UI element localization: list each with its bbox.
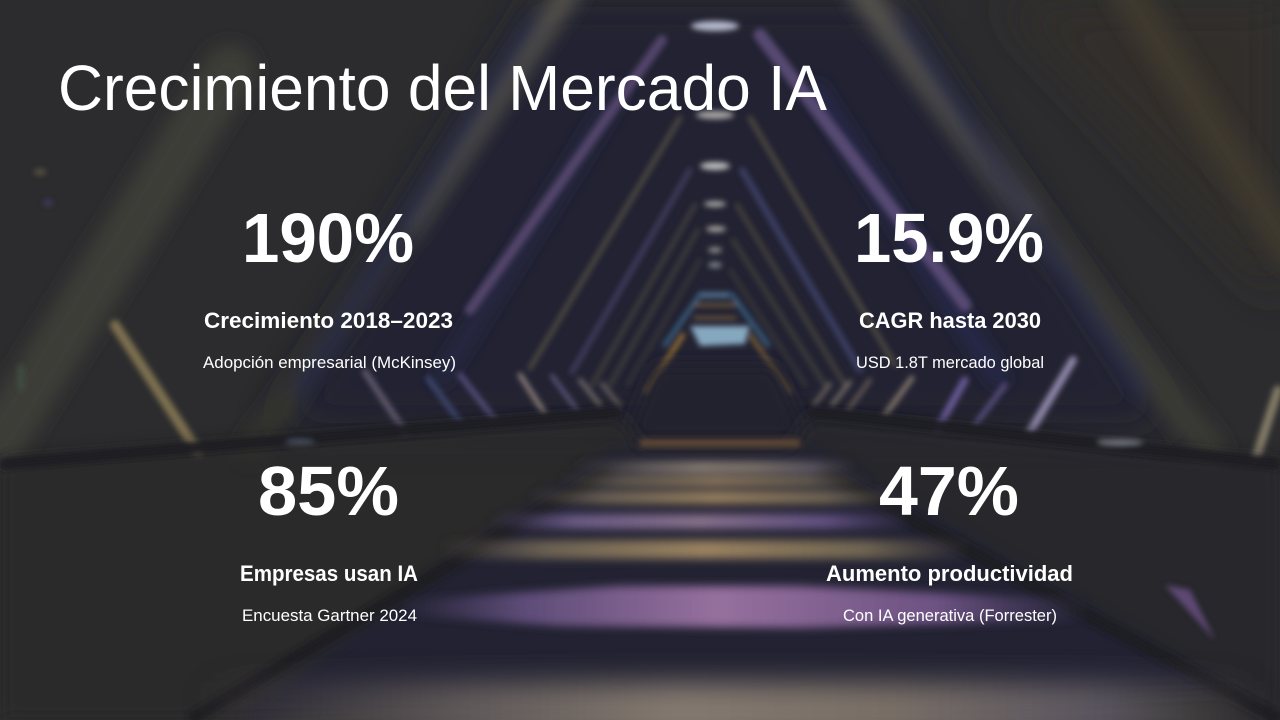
panel: 15.9% CAGR stat	[854, 199, 1044, 372]
panel: 47% productivity stat	[826, 452, 1073, 625]
value: 190%	[242, 199, 414, 277]
panel: 190% growth stat	[203, 199, 456, 372]
description: Adopción empresarial (McKinsey)	[203, 354, 456, 372]
heading: Empresas usan IA	[240, 561, 418, 586]
panel: 85% companies stat	[240, 452, 418, 625]
value: 85%	[258, 452, 399, 530]
description: Con IA generativa (Forrester)	[843, 607, 1057, 625]
heading: Crecimiento 2018–2023	[204, 308, 453, 333]
description: Encuesta Gartner 2024	[242, 607, 417, 625]
description: USD 1.8T mercado global	[856, 354, 1044, 372]
value: 15.9%	[854, 199, 1044, 277]
heading: CAGR hasta 2030	[859, 308, 1041, 333]
heading: Aumento productividad	[826, 561, 1073, 586]
value: 47%	[879, 452, 1019, 530]
title: Crecimiento del Mercado IA	[58, 52, 827, 124]
